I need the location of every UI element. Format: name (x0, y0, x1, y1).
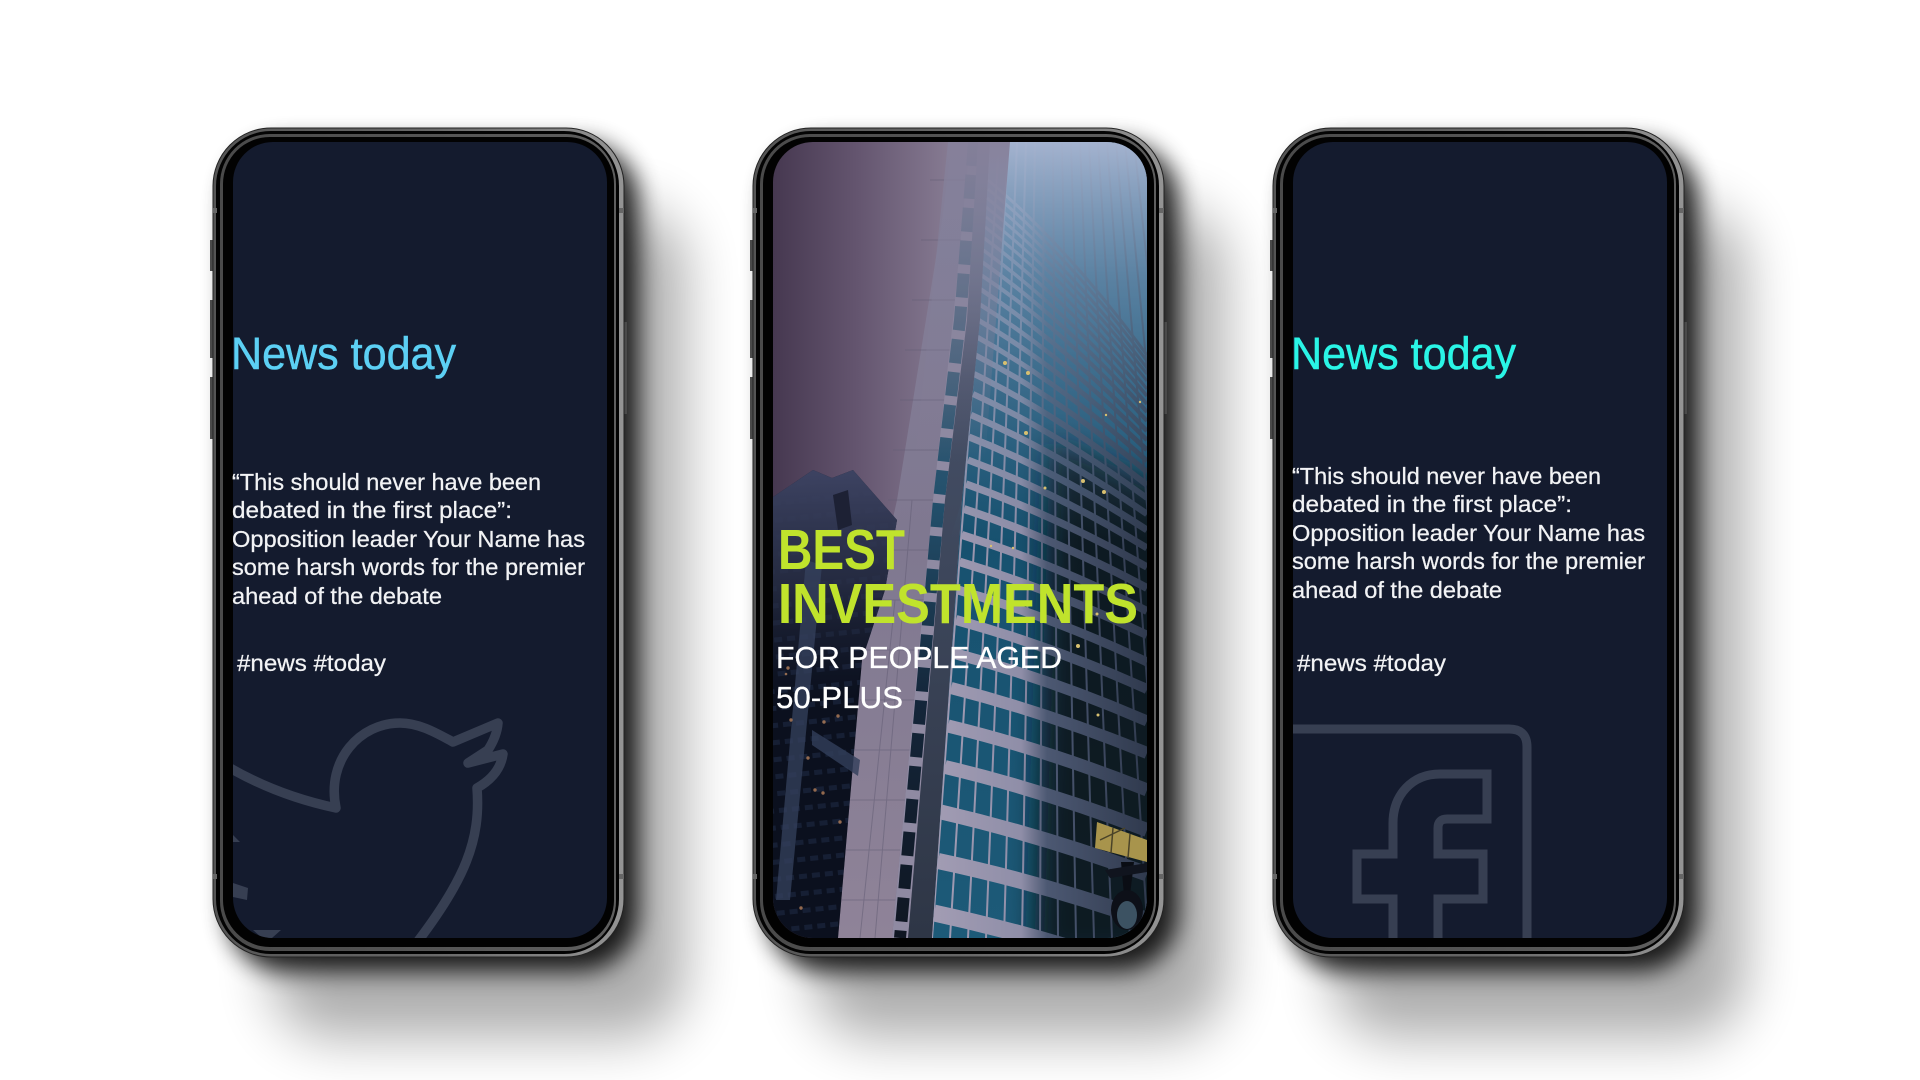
street lamp (1105, 862, 1147, 930)
dark foreground building (773, 470, 897, 938)
phone shadow (1287, 142, 1744, 1037)
tower corner band (908, 214, 986, 938)
hashtags: #news #today (237, 650, 387, 676)
twitter bird outline icon (225, 723, 503, 945)
lit office windows (1095, 822, 1147, 862)
quote text (232, 469, 585, 609)
floors (934, 180, 1147, 973)
phone side buttons (750, 240, 1167, 439)
quote text: Opposition leader Your Name has (1292, 520, 1645, 546)
glass face (932, 142, 1147, 938)
phone: investments post (750, 128, 1238, 1037)
quote text: Opposition leader Your Name has (232, 526, 585, 552)
subheading: for people aged 50-plus (776, 640, 1062, 715)
dark reflected windows (1016, 430, 1147, 938)
fog over the top of the tower (932, 142, 1147, 512)
heading: news today: News today (1291, 328, 1516, 379)
phone side buttons (1270, 240, 1687, 439)
tower lights (785, 666, 842, 910)
phone: twitter news post (210, 128, 684, 1037)
quote text: some harsh words for the premier (1292, 548, 1645, 574)
quote text: “This should never have been (232, 469, 541, 495)
quote text: debated in the first place”: (1292, 491, 1572, 517)
heading: best investments: BEST (778, 518, 905, 582)
tall tower light face (838, 180, 960, 938)
quote text: “This should never have been (1292, 463, 1601, 489)
hashtags: #news #today (1297, 650, 1447, 676)
small window lights (990, 361, 1141, 716)
phone body (213, 128, 624, 957)
tower notch windows (892, 142, 978, 938)
phone shadow (227, 142, 684, 1037)
quote text: ahead of the debate (232, 583, 442, 609)
facebook outline icon (1285, 729, 1527, 945)
quote text: some harsh words for the premier (232, 554, 585, 580)
subheading: for people aged 50-plus: 50-PLUS (776, 680, 903, 715)
heading: best investments: INVESTMENTS (778, 572, 1138, 636)
phone body (753, 128, 1164, 957)
phone: facebook news post (1270, 128, 1744, 1037)
subheading: for people aged 50-plus: FOR PEOPLE AGED (776, 640, 1062, 675)
heading: news today: News today (231, 328, 456, 379)
quote text: debated in the first place”: (232, 497, 512, 523)
window mullions (932, 143, 1147, 938)
phone shadow (767, 142, 1224, 1037)
heading: best investments (778, 518, 1138, 636)
quote text (1292, 463, 1645, 603)
phone side buttons (210, 240, 627, 439)
phone body (1273, 128, 1684, 957)
skyscraper photo (773, 142, 1147, 938)
quote text: ahead of the debate (1292, 577, 1502, 603)
sky (773, 142, 1147, 938)
